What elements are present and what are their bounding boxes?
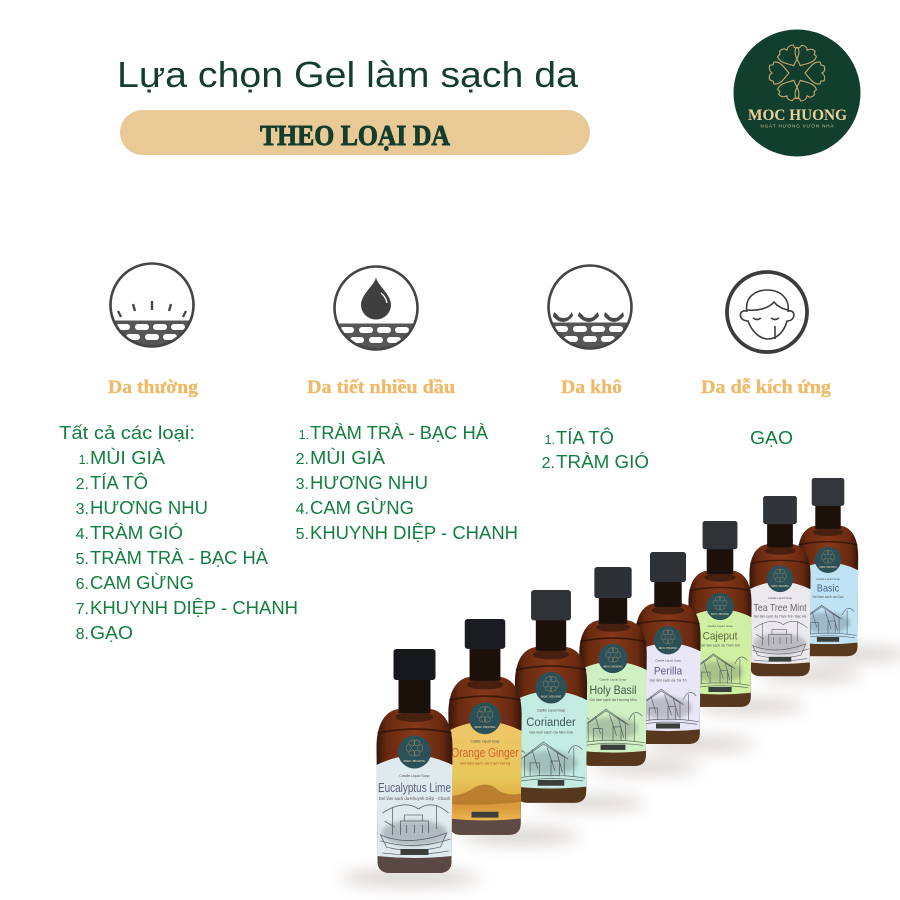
icon: oily skin — [332, 266, 420, 354]
list: dry skin: 2. — [542, 455, 555, 472]
bottle: Orange Ginger — [448, 619, 522, 835]
list: normal skin: CAM GỪNG — [90, 572, 194, 593]
list: oily skin: MÙI GIÀ — [310, 447, 385, 468]
heading: Da khô: Da khô — [561, 377, 622, 398]
icon: dry skin — [546, 266, 634, 352]
bottle: Eucalyptus Lime — [376, 649, 452, 873]
logo: Moc Huong: NGÁT HƯƠNG VƯỜN NHÀ — [760, 122, 834, 128]
bottle: Cajeput: Cajeput — [703, 631, 737, 643]
bottle: Holy Basil — [579, 567, 647, 766]
bottle: Eucalyptus Lime: MOC HUONG — [404, 759, 426, 763]
bottle: Coriander — [515, 590, 587, 803]
list: sensitive skin: GẠO — [750, 428, 793, 448]
list: normal skin: HƯƠNG NHU — [90, 498, 208, 518]
bottle: Eucalyptus Lime: Eucalyptus Lime — [378, 780, 451, 795]
bottle: Perilla: Castile Liquid Soap — [655, 659, 681, 663]
list: dry skin: TRÀM GIÓ — [556, 451, 649, 472]
bottle: Tea Tree Mint: Tea Tree Mint — [753, 603, 807, 614]
list: oily skin: 2. — [296, 451, 309, 468]
list: normal skin: TRÀM TRÀ - BẠC HÀ — [90, 548, 268, 568]
bottle: Holy Basil: Castile Liquid Soap — [600, 678, 627, 682]
list: oily skin: HƯƠNG NHU — [310, 473, 428, 493]
list: oily skin: 4. — [296, 501, 309, 518]
product shadows — [340, 647, 900, 886]
list: normal skin: KHUYNH DIỆP - CHANH — [90, 598, 298, 618]
logo: Moc Huong: MOC HUONG — [748, 107, 848, 124]
icon: sensitive skin — [727, 272, 807, 352]
bottle: Coriander: Coriander — [526, 715, 576, 729]
bottle: Holy Basil: MOC HUONG — [603, 664, 623, 668]
list: oily skin: CAM GỪNG — [310, 497, 414, 518]
bottle: Eucalyptus Lime: Castile Liquid Soap — [399, 774, 430, 778]
bottle: Basic: Gel làm sạch da Gạo — [812, 595, 844, 599]
bottle: Basic: Castile Liquid Soap — [816, 577, 840, 581]
list: dry skin — [542, 427, 649, 472]
heading: Da thường: Da thường — [108, 377, 199, 398]
list: normal skin: 8. — [76, 626, 89, 643]
subtitle pill: THEO LOẠI DA — [260, 120, 450, 152]
bottle: Basic: Basic — [817, 584, 839, 595]
list: normal skin: 2. — [76, 476, 89, 493]
bottle: Eucalyptus Lime: Gel làm sạch da Khuynh Diệp - Chanh — [379, 796, 451, 801]
heading: Da tiết nhiều dầu: Da tiết nhiều dầu — [307, 377, 455, 398]
bottle: Orange Ginger: Orange Ginger — [451, 746, 519, 760]
list: normal skin: 5. — [76, 551, 89, 568]
list: oily skin — [296, 423, 518, 543]
list: oily skin: 1. — [299, 428, 309, 442]
bottle: Tea Tree Mint: Castile Liquid Soap — [768, 596, 792, 600]
bottle: Coriander: MOC HUONG — [541, 694, 562, 698]
list: normal skin: 6. — [76, 576, 89, 593]
bottle: Perilla — [635, 552, 701, 744]
list: normal skin: 1. — [79, 453, 89, 467]
bottle: Basic: MOC HUONG — [819, 566, 838, 569]
bottle: Holy Basil: Gel làm sạch da Hương Nhu — [589, 698, 637, 702]
list: normal skin: MÙI GIÀ — [90, 447, 165, 468]
list: oily skin: 5. — [296, 526, 309, 543]
title: Lựa chọn Gel làm sạch da — [117, 54, 579, 95]
bottle: Coriander: Gel làm sạch da Mùi Già — [529, 729, 574, 734]
heading: Da dễ kích ứng: Da dễ kích ứng — [701, 377, 832, 398]
list: dry skin: TÍA TÔ — [556, 427, 614, 448]
bottle: Tea Tree Mint: Gel làm sạch da Tràm Trà - Bạc Hà — [754, 614, 806, 618]
list: oily skin: TRÀM TRÀ - BẠC HÀ — [310, 423, 488, 443]
list: normal skin: Tất cả các loại: — [59, 423, 195, 443]
bottle: Holy Basil: Holy Basil — [589, 685, 637, 697]
logo: Moc Huong — [734, 30, 860, 156]
list: normal skin: 7. — [76, 601, 89, 618]
subtitle pill — [120, 110, 590, 155]
bottle: Basic — [798, 478, 858, 656]
bottle: Cajeput — [688, 521, 752, 707]
icon: normal skin — [108, 264, 196, 350]
list: normal skin: 4. — [76, 526, 89, 543]
bottle: Tea Tree Mint — [749, 496, 811, 676]
list: dry skin: 1. — [545, 433, 555, 447]
bottle: Cajeput: MOC HUONG — [711, 612, 730, 616]
bottle: Perilla: MOC HUONG — [659, 646, 678, 650]
list: normal skin — [59, 423, 298, 643]
list: normal skin: TÍA TÔ — [90, 472, 148, 493]
list: oily skin: KHUYNH DIỆP - CHANH — [310, 523, 518, 543]
bottle: Cajeput: Gel làm sạch da Tràm Gió — [700, 643, 740, 647]
bottle: Perilla: Gel làm sạch da Tía Tô — [649, 678, 687, 682]
list: oily skin: 3. — [296, 476, 309, 493]
bottle: Perilla: Perilla — [654, 666, 683, 678]
list: normal skin: TRÀM GIÓ — [90, 522, 183, 543]
bottle: Orange Ginger: Gel làm sạch da Cam Gừng — [460, 761, 510, 766]
list: normal skin: GẠO — [90, 623, 133, 643]
bottle: Orange Ginger: Castile Liquid Soap — [471, 739, 500, 743]
list: normal skin: 3. — [76, 501, 89, 518]
bottle: Cajeput: Castile Liquid Soap — [708, 624, 733, 628]
bottle: Orange Ginger: MOC HUONG — [474, 725, 496, 729]
bottle: Coriander: Castile Liquid Soap — [537, 709, 565, 713]
bottle: Tea Tree Mint: MOC HUONG — [771, 585, 790, 588]
